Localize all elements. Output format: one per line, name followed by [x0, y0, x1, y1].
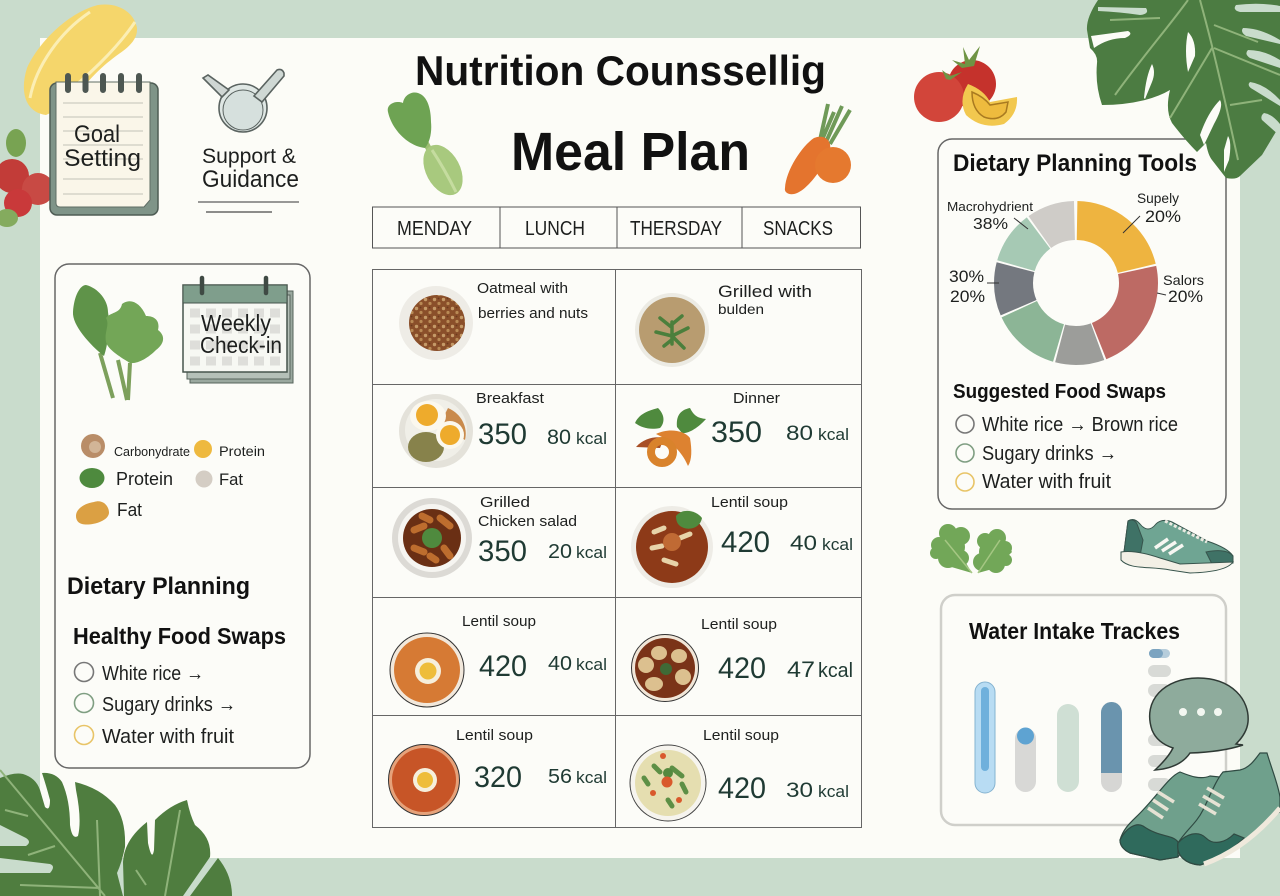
meal: dinner: Dinner [733, 390, 780, 407]
heading: healthy food swaps: Healthy Food Swaps [73, 623, 286, 649]
meal: dinner: 350 [711, 416, 762, 449]
panel: dietary planning tools [938, 139, 1226, 509]
chart labels: 30% [949, 267, 984, 286]
meal: lentil soup with egg: kcal [576, 655, 607, 674]
meal: vegetable soup: kcal [818, 782, 849, 801]
notepad label: Setting [64, 145, 141, 172]
meal: lentil soup with garnish: kcal [822, 535, 853, 554]
meal: tomato soup with egg: Lentil soup [456, 727, 533, 744]
legend: macronutrient foods: Fat [219, 470, 243, 489]
list: healthy food swaps [74, 662, 236, 748]
meal: vegetable soup [630, 727, 849, 821]
meal: lentil soup with dumplings: 420 [718, 652, 766, 685]
calendar label: Check-in [200, 332, 282, 358]
heading: dietary planning tools: Dietary Planning Tools [953, 150, 1197, 177]
meal: tomato soup with egg: kcal [576, 768, 607, 787]
meal: tomato soup with egg: 320 [474, 761, 522, 794]
meal: grilled chicken salad: Grilled [480, 494, 530, 511]
title: Nutrition Counssellig [415, 47, 826, 94]
calendar label: Weekly [201, 310, 271, 336]
icon: leafy greens [73, 285, 163, 400]
chart labels: 38% [973, 216, 1008, 233]
list: healthy food swaps: Sugary drinks → [102, 694, 236, 716]
meal: lentil soup with egg: 420 [479, 650, 527, 683]
level pills [1148, 649, 1171, 791]
meal: tomato soup with egg [388, 727, 607, 816]
icon: goal setting notepad [50, 76, 158, 215]
table header: days [372, 207, 860, 248]
legend: macronutrient foods: Carbonydrate [114, 444, 190, 459]
meal: grilled chicken salad [392, 494, 607, 578]
icon: monstera leaf bottom left [0, 770, 232, 896]
heading: suggested food swaps: Suggested Food Swaps [953, 381, 1166, 403]
meal: lentil soup with dumplings [632, 616, 853, 702]
meal: grilled with bulden: Grilled with [718, 282, 812, 301]
legend: macronutrient foods: Protein [219, 443, 265, 459]
meal: lentil soup with garnish: 40 [790, 532, 817, 555]
meal: oatmeal: Oatmeal with [477, 280, 568, 297]
chart labels: 20% [1168, 287, 1203, 306]
meal: lentil soup with garnish [631, 494, 853, 588]
meal: lentil soup with garnish: Lentil soup [711, 494, 788, 511]
subtitle: meal plan: Meal Plan [511, 122, 750, 182]
chart labels: Salors [1163, 272, 1204, 288]
water bars [975, 682, 1122, 793]
legend: macronutrient foods [76, 434, 265, 525]
list: suggested food swaps: Water with fruit [982, 471, 1111, 493]
icon: tomato and lemon [914, 46, 1017, 126]
panel: water intake tracker [941, 595, 1226, 825]
table header: days: SNACKS [763, 218, 833, 240]
meal: breakfast: kcal [576, 429, 607, 448]
meal: breakfast [399, 390, 607, 468]
table header: days: THERSDAY [630, 218, 722, 240]
support and guidance text [198, 145, 299, 212]
chart labels: Supely [1137, 190, 1179, 206]
notepad label: Goal [74, 121, 120, 148]
meal: oatmeal [399, 280, 588, 360]
meal: grilled chicken salad: Chicken salad [478, 513, 577, 530]
meal: grilled with bulden: bulden [718, 301, 764, 317]
icon: parsley [930, 524, 1012, 573]
icon: speech bubble [1150, 678, 1248, 770]
meal: breakfast: 350 [478, 418, 527, 451]
list: healthy food swaps: Water with fruit [102, 726, 234, 748]
meal: grilled chicken salad: kcal [576, 543, 607, 562]
table header: days: MENDAY [397, 218, 472, 240]
meal: vegetable soup: 420 [718, 772, 766, 805]
support and guidance text: Support & [202, 145, 296, 168]
meal: lentil soup with dumplings: kcal [818, 660, 853, 682]
icon: support flask [203, 69, 284, 132]
chart labels: 20% [950, 287, 985, 306]
meal: grilled chicken salad: 350 [478, 535, 527, 568]
meal: dinner: kcal [818, 425, 849, 444]
panel: left column [55, 264, 310, 768]
icon: carrot and orange [785, 104, 851, 194]
meal: lentil soup with garnish: 420 [721, 526, 770, 559]
icon: small running shoe [1121, 520, 1233, 573]
table header: days: LUNCH [525, 218, 585, 240]
meal: vegetable soup: Lentil soup [703, 727, 779, 744]
meal: oatmeal: berries and nuts [478, 305, 588, 322]
meal: grilled with bulden [635, 282, 812, 367]
chart labels [947, 190, 1204, 306]
list: suggested food swaps: White rice → Brown rice [982, 414, 1178, 436]
list: suggested food swaps [956, 414, 1178, 493]
meal: lentil soup with egg: 40 [548, 653, 572, 675]
icon: bok choy [388, 92, 471, 202]
icon: red berries [0, 129, 54, 227]
support and guidance text: Guidance [202, 166, 299, 193]
meal: tomato soup with egg: 56 [548, 766, 572, 788]
calendar label [200, 310, 282, 358]
icon: lemon slice [24, 4, 137, 115]
meal: dinner: 80 [786, 422, 813, 445]
meal: lentil soup with egg [390, 613, 607, 707]
meal: lentil soup with dumplings: Lentil soup [701, 616, 777, 633]
legend: macronutrient foods: Fat [117, 500, 142, 520]
heading: water intake tracker: Water Intake Trackes [969, 618, 1180, 644]
meal: dinner [635, 390, 849, 466]
meal: grilled chicken salad: 20 [548, 541, 572, 563]
meal: breakfast: 80 [547, 426, 571, 449]
notepad label [64, 121, 141, 172]
list: healthy food swaps: White rice → [102, 663, 204, 685]
meal grid [372, 269, 862, 828]
list: suggested food swaps: Sugary drinks → [982, 443, 1117, 465]
chart labels: 20% [1145, 207, 1181, 226]
legend: macronutrient foods: Protein [116, 469, 173, 489]
chart labels: Macrohydrient [947, 199, 1033, 214]
icon: monstera leaf top right [1087, 0, 1280, 179]
meal: lentil soup with egg: Lentil soup [462, 613, 536, 630]
donut chart [1014, 220, 1138, 346]
meal: breakfast: Breakfast [476, 390, 545, 407]
meal: lentil soup with dumplings: 47 [787, 657, 815, 682]
icon: weekly check-in calendar [183, 278, 293, 383]
icon: running shoes pair [1120, 753, 1280, 865]
heading: dietary planning: Dietary Planning [67, 573, 250, 600]
meal: vegetable soup: 30 [786, 779, 813, 802]
